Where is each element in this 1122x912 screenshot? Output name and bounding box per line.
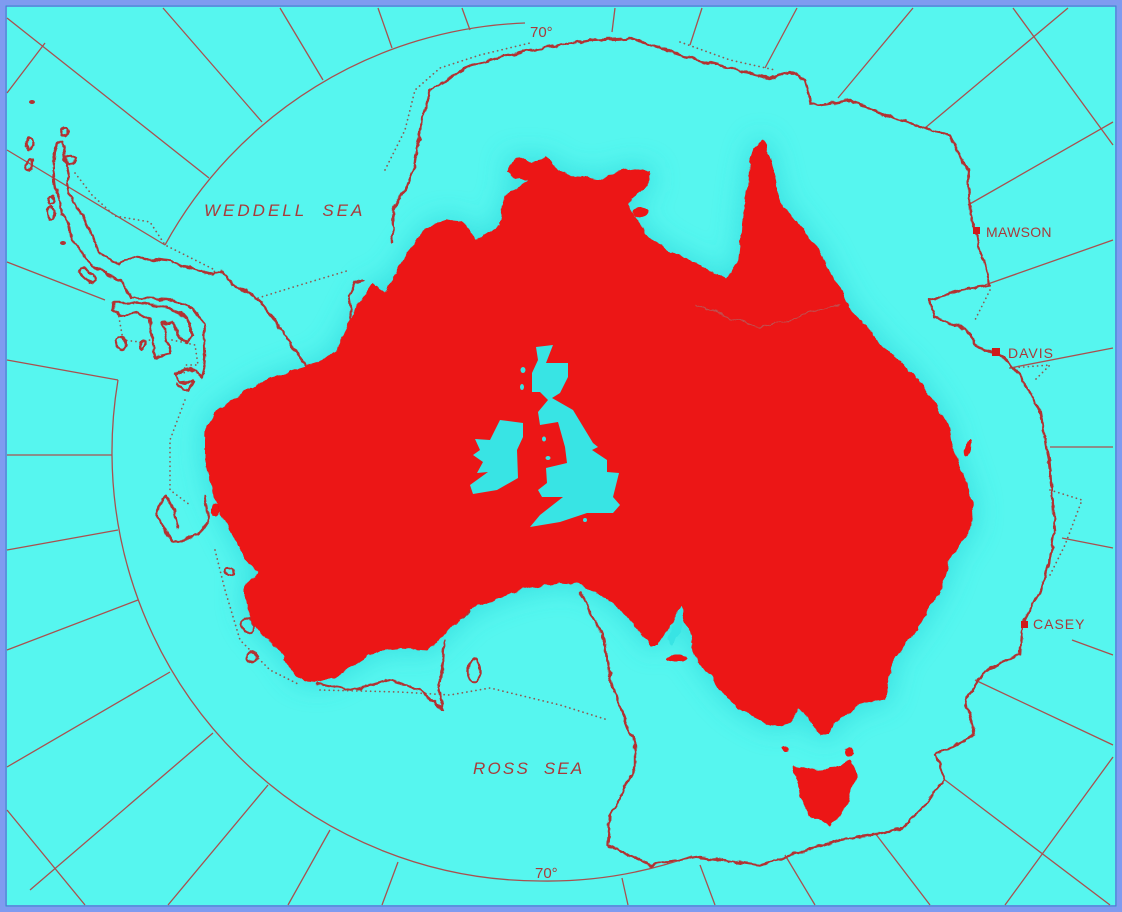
station markers [973, 227, 1028, 628]
Kangaroo Island [666, 655, 688, 663]
British Isles cut-outs [470, 345, 620, 527]
main East Antarctic coast [392, 38, 1055, 865]
Ronne ice shelf inlets [112, 303, 193, 357]
label: Ross Sea: ROSS SEA [473, 759, 584, 778]
Tasmania [793, 762, 858, 825]
label: 70 degrees top: 70° [530, 24, 553, 41]
Antarctic Peninsula and West coast [53, 143, 206, 391]
Filchner notch [349, 281, 364, 318]
label: Casey: CASEY [1033, 616, 1085, 632]
Gulf notch [668, 605, 683, 645]
label: Davis: DAVIS [1008, 345, 1054, 361]
other islands [846, 748, 854, 758]
west ice shelf loop [156, 495, 208, 543]
Ireland [470, 420, 523, 494]
small islands outlined [468, 659, 480, 683]
state border trace [695, 305, 840, 328]
label: 70 degrees bottom: 70° [535, 865, 558, 882]
dotted grounding lines [75, 42, 1082, 720]
Australia landmass [205, 141, 973, 825]
small solid islands [29, 100, 66, 245]
Ross ice shelf edge [318, 640, 445, 710]
label: Weddell Sea: WEDDELL SEA [204, 201, 365, 220]
label: Mawson: MAWSON [986, 224, 1052, 240]
Great Britain [530, 345, 620, 527]
glow around land [205, 141, 973, 735]
Hebrides, Man, Wight [520, 367, 526, 373]
